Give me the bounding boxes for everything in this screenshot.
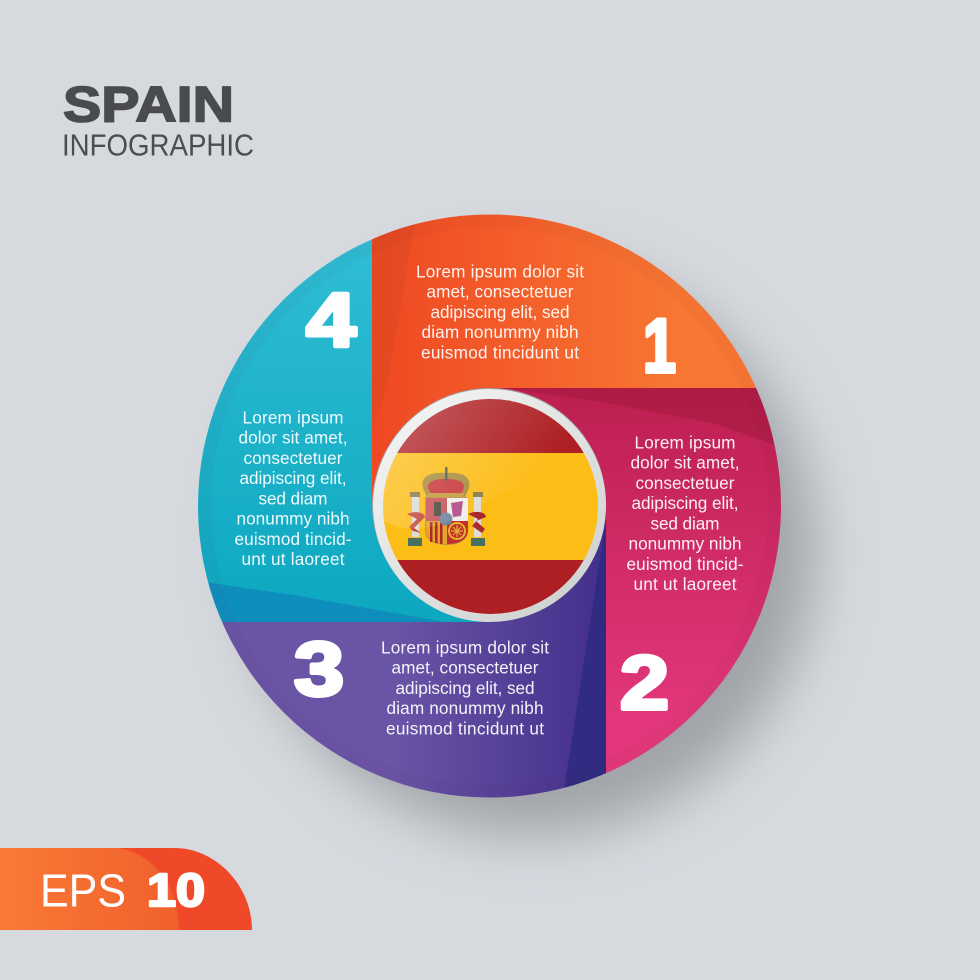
number 1: 1 bbox=[643, 304, 676, 389]
text block 2: Lorem ipsum bbox=[634, 432, 736, 452]
text block 4: dolor sit amet, bbox=[238, 428, 348, 448]
text block 1: diam nonummy nibh bbox=[422, 322, 578, 342]
number 2: 2 bbox=[620, 641, 669, 726]
text block 1: amet, consectetuer bbox=[426, 282, 574, 302]
text block 2: sed diam bbox=[650, 513, 720, 533]
text block 4: euismod tincid- bbox=[234, 529, 352, 549]
version number: 10 bbox=[147, 864, 205, 916]
text block 4: Lorem ipsum bbox=[242, 408, 344, 428]
panel 1: orange bbox=[372, 214, 756, 504]
text block 1: Lorem ipsum dolor sit bbox=[416, 262, 584, 282]
number 4: 4 bbox=[306, 278, 356, 363]
Spanish flag bbox=[380, 395, 602, 618]
text block 3: adipiscing elit, sed bbox=[396, 678, 534, 698]
text block 2 bbox=[626, 432, 744, 594]
right pillar bbox=[468, 492, 486, 546]
EPS label: EPS bbox=[40, 864, 126, 916]
text block 2: dolor sit amet, bbox=[630, 453, 740, 473]
coat of arms bbox=[407, 467, 486, 546]
text block 4: sed diam bbox=[258, 488, 328, 508]
text block 4: nonummy nibh bbox=[236, 509, 350, 529]
circular diagram bbox=[190, 205, 792, 800]
flag gloss bbox=[383, 399, 556, 528]
crown bbox=[423, 467, 469, 497]
left pillar bbox=[407, 492, 425, 546]
title bbox=[62, 76, 254, 162]
badge: EPS 10 bbox=[0, 848, 252, 930]
text block 3 bbox=[381, 638, 549, 738]
panel 2: crimson bbox=[490, 388, 790, 785]
shield bbox=[425, 497, 468, 545]
text block 2: consectetuer bbox=[636, 473, 735, 493]
rim highlight bbox=[204, 221, 774, 791]
text block 1: adipiscing elit, sed bbox=[430, 302, 570, 322]
text block 3: amet, consectetuer bbox=[392, 658, 539, 678]
text block 3: euismod tincidunt ut bbox=[386, 718, 544, 738]
text block 4 bbox=[234, 408, 352, 569]
heading: Spain: SPAIN bbox=[63, 76, 234, 132]
disc drop shadow bbox=[245, 265, 815, 835]
text block 3: diam nonummy nibh bbox=[386, 698, 544, 718]
badge ring bbox=[373, 389, 606, 622]
text block 2: unt ut laoreet bbox=[634, 574, 737, 594]
text block 4: unt ut laoreet bbox=[242, 549, 345, 569]
panel 4: teal bbox=[198, 239, 484, 622]
subheading: Infographic: INFOGRAPHIC bbox=[62, 128, 254, 162]
text block 2: nonummy nibh bbox=[628, 534, 742, 554]
flag badge bbox=[373, 389, 606, 622]
text block 2: adipiscing elit, bbox=[632, 493, 738, 513]
text block 4: adipiscing elit, bbox=[240, 468, 346, 488]
text block 4: consectetuer bbox=[244, 448, 343, 468]
text block 2: euismod tincid- bbox=[626, 554, 744, 574]
panel 3: purple bbox=[190, 506, 606, 800]
text block 1 bbox=[416, 262, 584, 362]
text block 1: euismod tincidunt ut bbox=[421, 342, 579, 362]
number 3: 3 bbox=[294, 627, 344, 712]
text block 3: Lorem ipsum dolor sit bbox=[381, 638, 549, 658]
